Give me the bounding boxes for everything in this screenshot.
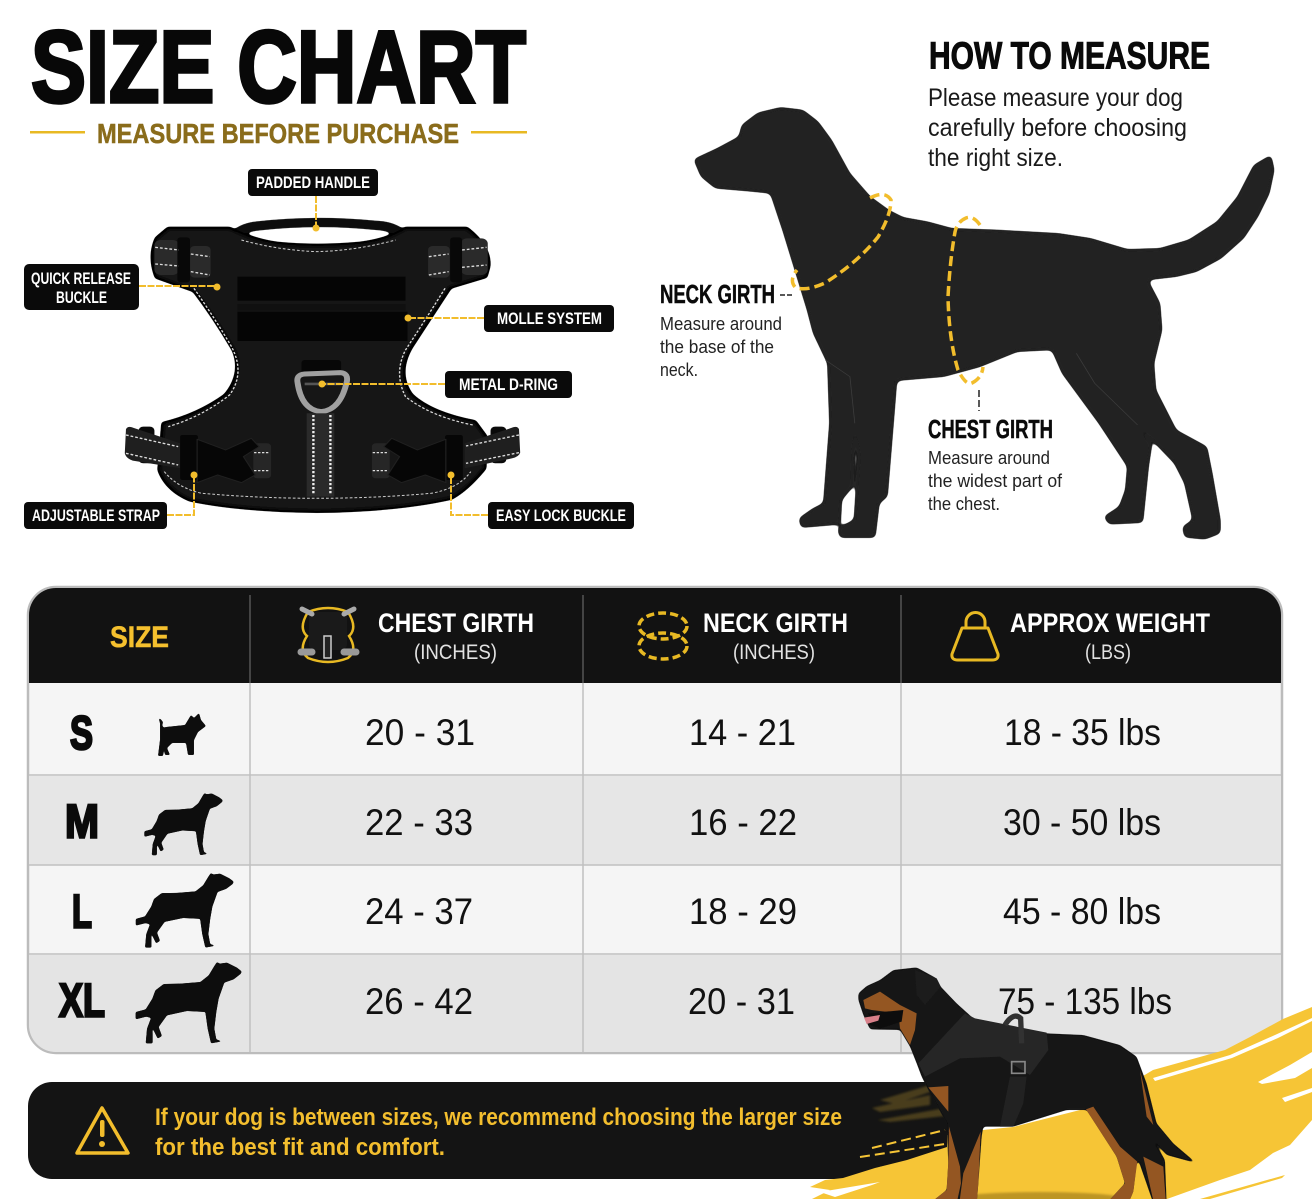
table header: (INCHES): [414, 641, 497, 664]
chest girth leader: [978, 390, 980, 411]
neck girth text: neck.: [660, 360, 698, 380]
harness photo: [125, 222, 520, 511]
chest girth text: the widest part of: [928, 471, 1063, 491]
row: M: M: [65, 794, 99, 848]
icon: warning: [77, 1108, 128, 1153]
icon: harness: [301, 608, 356, 662]
neck girth text: NECK GIRTH: [660, 279, 775, 309]
row: M: 16 - 22: [689, 802, 797, 843]
label: quick release buckle: BUCKLE: [56, 288, 107, 307]
chest girth dashed line: [948, 217, 983, 383]
label: easy lock buckle: [488, 502, 634, 529]
approx weight heading: APPROX WEIGHT: [1010, 608, 1210, 638]
label: quick release buckle: [24, 264, 139, 310]
table header: [29, 588, 1281, 683]
heading: how to measure: HOW TO MEASURE: [929, 36, 1210, 78]
row: XL: XL: [59, 974, 105, 1026]
chest girth text: [928, 414, 1063, 514]
intro text: carefully before choosing: [928, 114, 1187, 142]
label: quick release buckle: QUICK RELEASE: [31, 269, 131, 288]
row: S: [70, 706, 1161, 759]
mouth and tongue: [868, 1010, 903, 1029]
row: L: 45 - 80 lbs: [1003, 891, 1161, 932]
label: easy lock buckle: EASY LOCK BUCKLE: [496, 506, 626, 525]
dog body: [858, 967, 1197, 1199]
label: adjustable strap: ADJUSTABLE STRAP: [32, 506, 160, 525]
icon: weight: [952, 612, 998, 660]
chest girth text: Measure around: [928, 448, 1050, 468]
neck girth leader: [780, 294, 792, 296]
neck girth heading: NECK GIRTH: [703, 608, 848, 638]
row: M: 22 - 33: [365, 802, 473, 843]
row: XL: 20 - 31: [688, 981, 795, 1022]
top right adjuster: [428, 237, 488, 282]
chest girth heading: CHEST GIRTH: [378, 608, 534, 638]
measuring dog silhouette: [694, 107, 1274, 539]
top left adjuster: [154, 237, 211, 282]
label: adjustable strap: [24, 502, 167, 529]
row: M: 30 - 50 lbs: [1003, 802, 1161, 843]
row: M: [65, 793, 1161, 855]
label: padded handle: [248, 169, 378, 196]
chest girth text: CHEST GIRTH: [928, 414, 1053, 444]
title: size chart: [30, 10, 527, 149]
row: L: [72, 873, 1161, 948]
intro text: the right size.: [928, 144, 1063, 172]
right buckle: [384, 435, 463, 483]
recommendation text: for the best fit and comfort.: [155, 1134, 445, 1161]
rottweiler in harness: [858, 967, 1197, 1199]
icon: large dog: [136, 873, 234, 948]
table body: [28, 587, 1282, 1053]
intro text: [928, 84, 1187, 172]
yellow paint brush stroke: [810, 1007, 1312, 1199]
ground shadow: [960, 1192, 1120, 1199]
tan markings and details: [863, 970, 1166, 1199]
neck girth text: the base of the: [660, 337, 774, 357]
row bands: [29, 683, 1281, 1052]
label: molle system: MOLLE SYSTEM: [497, 309, 602, 328]
row: XL: 75 - 135 lbs: [998, 981, 1172, 1022]
icon: small dog: [158, 713, 206, 756]
label: metal d-ring: [445, 371, 572, 398]
left buckle: [180, 435, 259, 483]
row: XL: [59, 962, 1172, 1043]
chest girth text: the chest.: [928, 494, 1000, 514]
row: S: S: [70, 706, 93, 759]
recommendation text: [155, 1104, 842, 1161]
table header: (INCHES): [733, 641, 815, 664]
icon: medium dog: [144, 793, 223, 855]
side straps: [125, 427, 520, 478]
neck girth dashed line: [792, 194, 891, 289]
row: S: 14 - 21: [689, 712, 796, 753]
icon: extra large dog: [136, 962, 242, 1043]
size table: [28, 587, 1282, 1053]
intro text: Please measure your dog: [928, 84, 1183, 112]
callout leaders: [139, 196, 488, 515]
label: molle system: [484, 305, 614, 332]
label: metal d-ring: METAL D-RING: [459, 375, 558, 394]
row: L: L: [72, 884, 92, 938]
row: S: 18 - 35 lbs: [1004, 712, 1161, 753]
centre strap: [307, 413, 334, 497]
molle panels: [237, 277, 407, 341]
recommendation text: If your dog is between sizes, we recommend choosing the larger size: [155, 1104, 842, 1131]
neck girth text: Measure around: [660, 314, 782, 334]
title: size chart: SIZE CHART: [31, 10, 526, 124]
brush shading: [872, 1085, 945, 1122]
row: XL: 26 - 42: [365, 981, 473, 1022]
table header: (LBS): [1085, 641, 1131, 664]
size heading: SIZE: [110, 621, 169, 654]
subtitle: MEASURE BEFORE PURCHASE: [97, 118, 459, 149]
ear: [915, 970, 941, 1005]
neck girth text: [660, 279, 782, 380]
row: S: 20 - 31: [365, 712, 475, 753]
d-ring: [302, 360, 341, 373]
harness diagram: [24, 169, 634, 529]
row: L: 24 - 37: [365, 891, 473, 932]
label: padded handle: PADDED HANDLE: [256, 173, 370, 192]
row: L: 18 - 29: [689, 891, 797, 932]
icon: neck rings: [639, 613, 687, 659]
recommendation banner: [28, 1082, 950, 1179]
harness: [918, 1013, 1048, 1077]
